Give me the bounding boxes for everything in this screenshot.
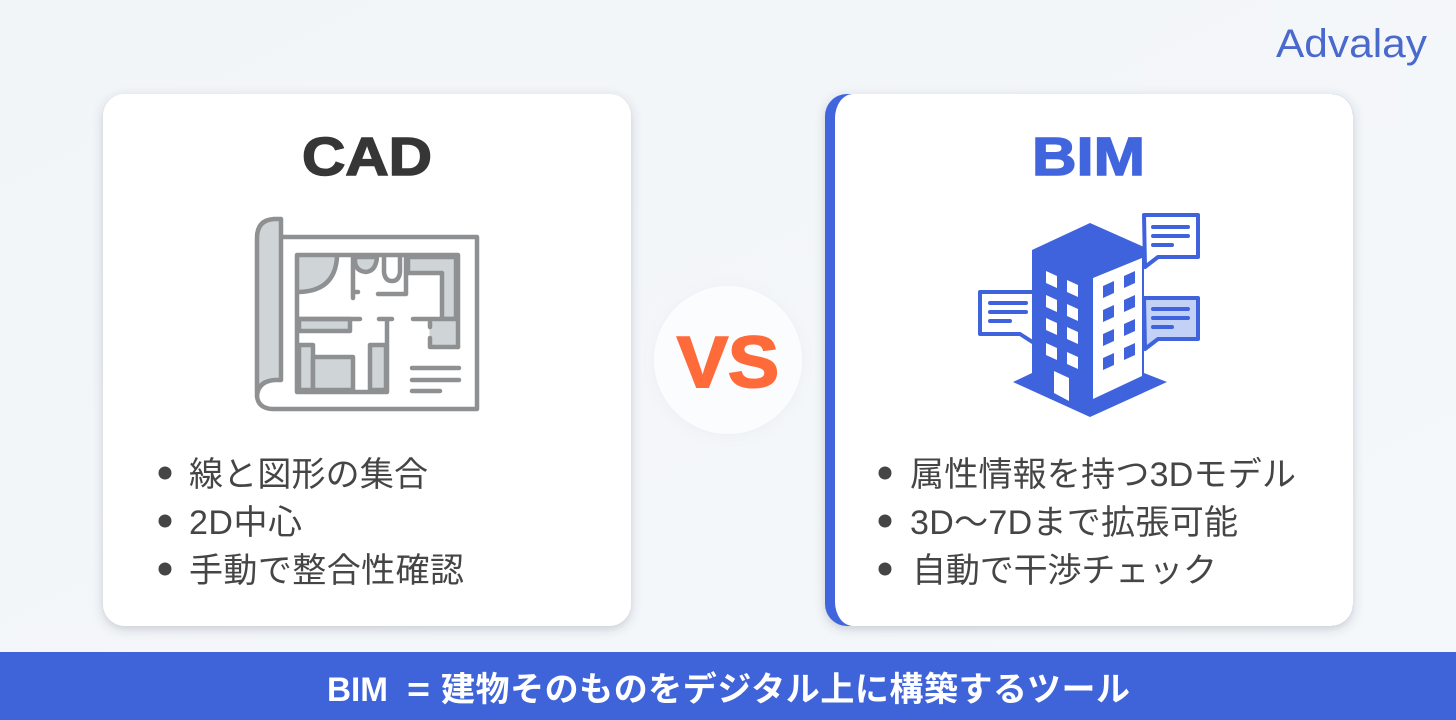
heading: BIM: BIM (1032, 127, 1145, 187)
banner: summary: = (407, 671, 430, 709)
panel: BIM (825, 94, 1353, 626)
list: BIM features: 3D～7Dまで拡張可能 (910, 504, 1238, 542)
callout: middle right (1144, 298, 1198, 349)
badge: VS (654, 286, 802, 434)
icon: building with data callouts (980, 215, 1198, 417)
banner: summary: 建物そのものをデジタル上に構築するツール (441, 670, 1130, 709)
banner: summary: BIM (327, 671, 388, 709)
list: CAD features: 線と図形の集合 (189, 456, 428, 494)
heading: CAD: CAD (302, 127, 432, 187)
list: CAD features: 2D中心 (189, 504, 302, 542)
callout: top right (1144, 215, 1198, 267)
callout: left (980, 292, 1034, 343)
list: BIM features: 自動で干渉チェック (912, 552, 1217, 590)
icon: floor plan blueprint (257, 219, 477, 409)
list: BIM features: 属性情報を持つ3Dモデル (910, 456, 1296, 494)
panel: CAD (103, 94, 631, 626)
list: CAD features (158, 456, 464, 590)
list: BIM features (878, 456, 1296, 590)
badge: VS: VS (677, 323, 779, 403)
list: CAD features: 手動で整合性確認 (189, 552, 464, 590)
banner: summary (0, 652, 1456, 720)
logo: Advalay: Advalay (1276, 22, 1427, 66)
